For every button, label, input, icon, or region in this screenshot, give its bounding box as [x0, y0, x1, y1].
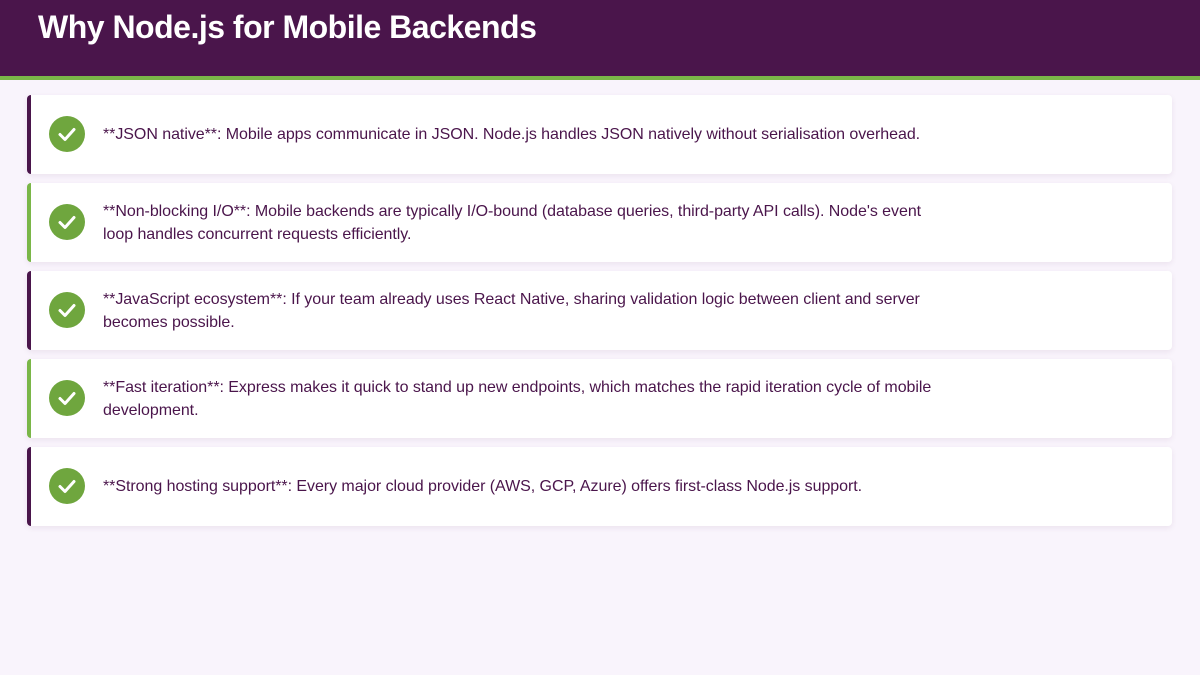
- title: Why Node.js for Mobile Backends: [38, 9, 536, 45]
- text: **Fast iteration**: Express makes it quick to stand up new endpoints, which matches the rapid iteration cycle of mobile development.: [103, 378, 931, 418]
- text: **Strong hosting support**: Every major cloud provider (AWS, GCP, Azure) offers first-class Node.js support.: [103, 478, 862, 495]
- icon: check: [49, 380, 85, 416]
- icon: check: [49, 292, 85, 328]
- card: Fast iteration: [27, 359, 1172, 438]
- text: **JavaScript ecosystem**: If your team already uses React Native, sharing validation logic between client and server becomes possible.: [103, 290, 920, 330]
- icon: check: [49, 116, 85, 152]
- icon: check: [49, 468, 85, 504]
- card: JSON native: [27, 95, 1172, 174]
- text: **Non-blocking I/O**: Mobile backends are typically I/O-bound (database queries, third-party API calls). Node's event loop handles concurrent requests efficiently.: [103, 202, 921, 242]
- icon: check: [49, 204, 85, 240]
- card: Non-blocking I/O: [27, 183, 1172, 262]
- text: **JSON native**: Mobile apps communicate in JSON. Node.js handles JSON natively without serialisation overhead.: [103, 126, 920, 143]
- card: Strong hosting support: [27, 447, 1172, 526]
- header: [0, 0, 1200, 80]
- card: JavaScript ecosystem: [27, 271, 1172, 350]
